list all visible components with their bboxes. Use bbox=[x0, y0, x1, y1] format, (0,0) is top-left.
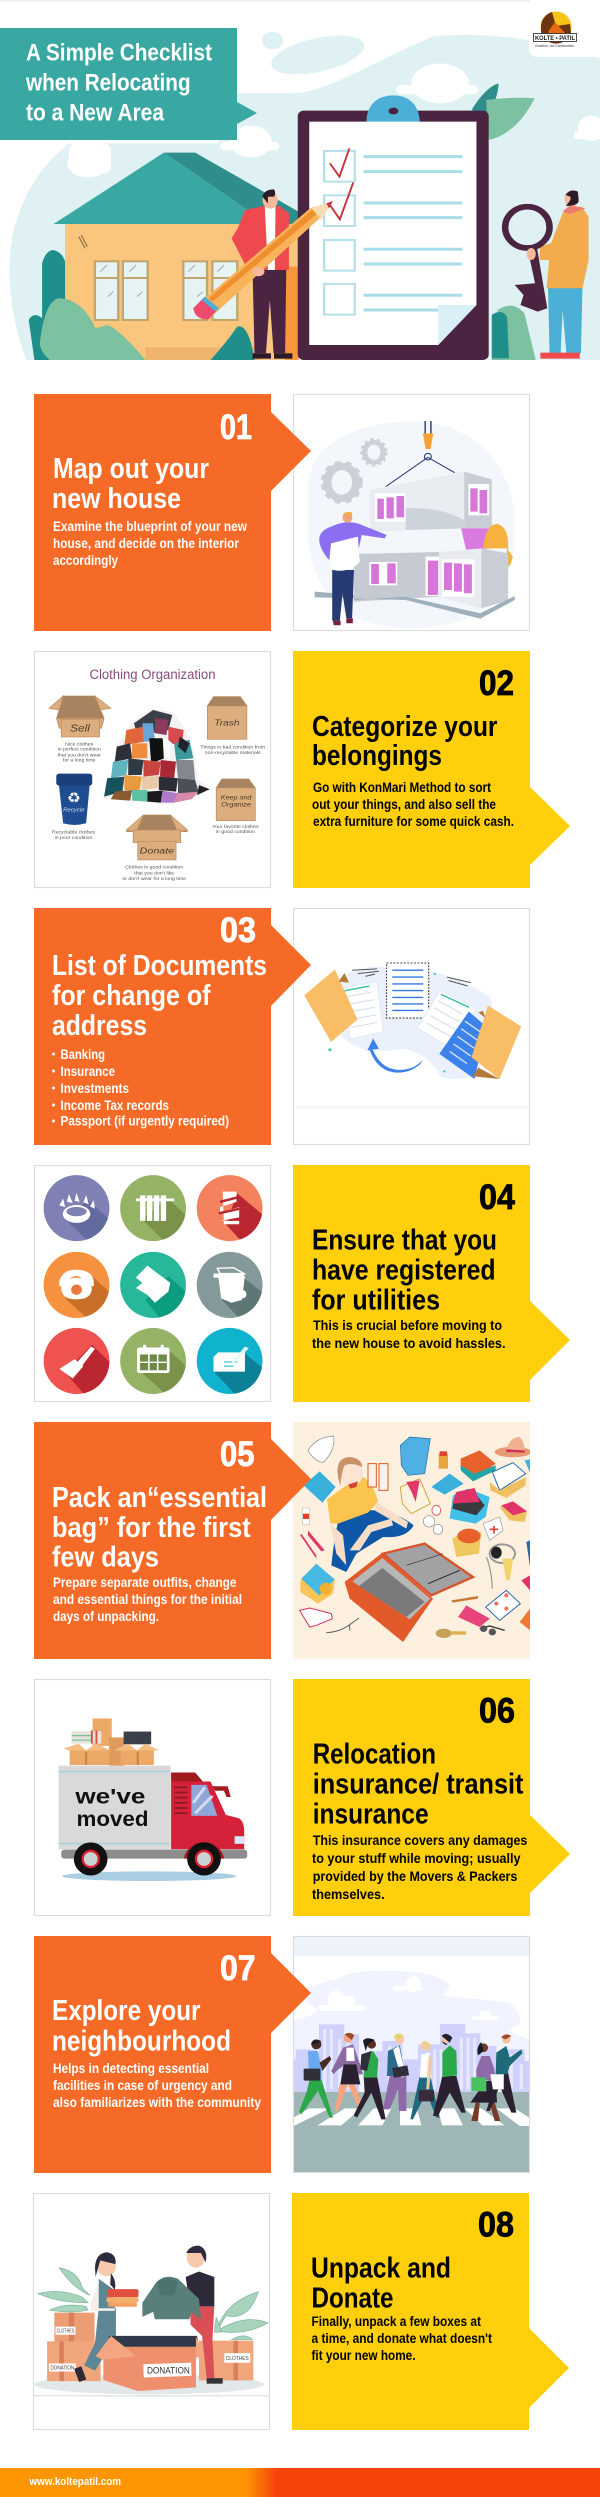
icon: return arrow bbox=[367, 1038, 423, 1073]
icon: recycle bin: Recycle bbox=[63, 807, 85, 813]
panel: step 05 text: days of unpacking. bbox=[53, 1608, 159, 1624]
panel: step 03 text: List of Documents bbox=[52, 950, 267, 982]
panel: step 01 text bbox=[34, 394, 311, 631]
list of documents: Investments bbox=[60, 1080, 129, 1096]
panel: step 04 text: Ensure that you bbox=[312, 1224, 497, 1256]
panel: step 08 text: Finally, unpack a few boxes at bbox=[312, 2313, 481, 2329]
title banner: A Simple Checklist bbox=[26, 40, 212, 67]
panel: step 02 image: for a long time bbox=[63, 758, 96, 763]
panel: step 02 image: Your favorite clothes bbox=[212, 824, 259, 830]
title banner bbox=[0, 28, 257, 140]
icon: radiator bbox=[120, 1175, 186, 1242]
panel: step 03 text: 03 bbox=[220, 911, 256, 950]
crosswalk bbox=[294, 2108, 529, 2126]
buildings skyline bbox=[294, 2024, 529, 2093]
panel: step 05 text bbox=[34, 1422, 311, 1659]
sign: we've moved bbox=[74, 1785, 148, 1831]
panel: step 01 text: Examine the blueprint of your new bbox=[53, 518, 247, 534]
boxes with labels: CLOTHES bbox=[226, 2356, 249, 2362]
panel: step 02 image: Donate bbox=[140, 846, 174, 855]
panel: step 02 text: belongings bbox=[312, 740, 442, 772]
main donation box bbox=[96, 2336, 205, 2391]
person 5 bbox=[410, 2041, 440, 2119]
panel: step 02 image: Nice clothes bbox=[65, 742, 94, 747]
person 4 bbox=[383, 2034, 409, 2111]
boxes with labels: DONATION bbox=[51, 2366, 74, 2372]
panel: step 07 street crowd image bbox=[293, 1936, 530, 2173]
list of documents: Income Tax records bbox=[60, 1097, 169, 1113]
boxes with labels bbox=[47, 2313, 253, 2381]
panel: step 06 text: themselves. bbox=[312, 1886, 385, 1902]
panel: step 04 utilities icons bbox=[34, 1166, 270, 1402]
panel: step 02 text: extra furniture for some quick cash. bbox=[313, 813, 514, 829]
panel: step 07 text: 07 bbox=[220, 1949, 256, 1988]
panel: step 06 text: to your stuff while moving; usually bbox=[312, 1850, 521, 1866]
person 2 bbox=[331, 2033, 363, 2111]
panel: step 04 text: have registered bbox=[312, 1254, 496, 1286]
panel: step 06 text: provided by the Movers & Packers bbox=[313, 1868, 518, 1884]
footer bar bbox=[0, 2468, 600, 2497]
panel: step 03 text: for change of bbox=[52, 980, 211, 1012]
hero illustration bbox=[0, 0, 600, 360]
icon: recycle bin: ♻ bbox=[67, 791, 81, 806]
panel: step 02 text: out your things, and also sell the bbox=[312, 796, 496, 812]
panel: step 01 text: new house bbox=[52, 483, 181, 515]
panel: step 04 text: for utilities bbox=[312, 1284, 440, 1316]
list of documents: Banking bbox=[60, 1046, 105, 1062]
panel: step 02 image: in perfect condition bbox=[58, 747, 101, 752]
icon: house bbox=[29, 153, 299, 360]
list of documents: Passport (if urgently required) bbox=[60, 1112, 229, 1128]
panel: step 07 text: facilities in case of urgency and bbox=[53, 2077, 232, 2093]
panel: step 05 text: 05 bbox=[220, 1435, 254, 1474]
panel: step 08 text: Unpack and bbox=[311, 2253, 451, 2285]
clothes pile bbox=[103, 708, 210, 805]
sign: we've moved: moved bbox=[77, 1807, 148, 1831]
panel: step 02 image: that you don't like bbox=[134, 871, 175, 876]
icon: man with key bbox=[492, 190, 589, 360]
person 3 bbox=[354, 2038, 386, 2119]
icon: man with pencil bbox=[193, 189, 333, 359]
man and jacket bbox=[142, 2246, 223, 2384]
panel: step 08 text bbox=[292, 2193, 569, 2430]
panel: step 02 text: Categorize your bbox=[312, 711, 498, 743]
panel: step 02 image: non-recyclable materials bbox=[205, 750, 261, 756]
panel: step 02 image: Things in bad condition from bbox=[200, 745, 265, 750]
panel: step 08 text: fit your new home. bbox=[312, 2347, 416, 2363]
panel: step 08 donation image bbox=[34, 2194, 270, 2430]
icon: left folder and paper bbox=[304, 970, 383, 1042]
main donation box: DONATION bbox=[147, 2366, 190, 2375]
panel: step 01 text: Map out your bbox=[53, 453, 209, 485]
panel: step 06 text bbox=[293, 1679, 570, 1916]
panel: step 05 text: bag” for the first bbox=[52, 1512, 251, 1544]
clothing and travel items bbox=[300, 1436, 531, 1638]
panel: step 08 text: 08 bbox=[478, 2206, 514, 2244]
logo: Creation, not Construction. bbox=[535, 43, 575, 48]
panel: step 07 text: Helps in detecting essential bbox=[53, 2060, 209, 2076]
panel: step 06 text: insurance bbox=[313, 1798, 429, 1830]
panel: step 02 image: Recyclable clothes bbox=[52, 830, 96, 835]
panel: step 02 image: Keep and bbox=[221, 794, 252, 801]
icon: recycle bin bbox=[56, 774, 92, 825]
panel: step 03 text: address bbox=[52, 1010, 147, 1042]
logo: KOLTE • PATIL bbox=[535, 36, 575, 42]
panel: step 04 text: the new house to avoid hassles. bbox=[312, 1335, 506, 1351]
panel: step 05 text: Prepare separate outfits, change bbox=[53, 1574, 237, 1590]
panel: step 02 image: that you don't wear bbox=[58, 753, 101, 758]
list of documents: Insurance bbox=[60, 1063, 115, 1079]
boxes with labels: CLOTHES bbox=[57, 2329, 75, 2334]
panel: step 04 text: This is crucial before moving to bbox=[313, 1317, 502, 1333]
person 6 bbox=[433, 2034, 466, 2116]
icon: plants bbox=[38, 2268, 268, 2340]
panel: step 07 text: Explore your bbox=[52, 1995, 200, 2027]
panel: step 02 image: Organize bbox=[221, 801, 251, 808]
panel: step 08 text: Donate bbox=[312, 2282, 394, 2314]
panel: step 02 text: 02 bbox=[479, 664, 514, 703]
panel: step 06 truck image bbox=[34, 1680, 270, 1916]
person 7 bbox=[470, 2042, 500, 2121]
icon: right folder and papers bbox=[417, 990, 521, 1079]
title banner: when Relocating bbox=[25, 70, 191, 97]
icon: calendar bbox=[120, 1328, 186, 1394]
panel: step 02 text bbox=[293, 651, 570, 888]
panel: step 01 text: accordingly bbox=[53, 552, 118, 568]
panel: step 05 text: Pack an“essential bbox=[52, 1482, 267, 1514]
panel: step 07 text bbox=[34, 1936, 311, 2173]
panel: step 06 text: insurance/ transit bbox=[313, 1769, 524, 1801]
panel: step 02 image: Trash bbox=[214, 718, 240, 727]
panel: step 08 text: a time, and donate what doesn't bbox=[312, 2330, 492, 2346]
panel: step 05 packing illustration bbox=[293, 1422, 531, 1659]
panel: step 02 image: in good condition bbox=[216, 829, 255, 835]
icon: signing a document bbox=[196, 1328, 262, 1394]
person 8 bbox=[486, 2034, 522, 2113]
icon: wheelie bin bbox=[196, 1252, 262, 1318]
panel: step 06 text: This insurance covers any damages bbox=[313, 1832, 528, 1848]
panel: step 02 text: Go with KonMari Method to sort bbox=[313, 779, 491, 795]
panel: step 02 image: Clothes in good condition bbox=[125, 865, 183, 870]
chart title: clothing organization: Clothing Organization bbox=[90, 667, 216, 682]
panel: step 05 text: and essential things for the initial bbox=[53, 1591, 242, 1607]
icon: boxes on truck bbox=[64, 1718, 159, 1766]
woman holding clothes bbox=[74, 2252, 139, 2382]
icon: dotted document bbox=[387, 963, 429, 1018]
panel: step 02 image: Sell bbox=[70, 723, 91, 734]
panel: step 02 image: in poor condition bbox=[55, 835, 93, 841]
logo bbox=[529, 0, 600, 57]
panel: step 07 text: also familiarizes with the community bbox=[53, 2094, 261, 2110]
panel: step 01 text: house, and decide on the interior bbox=[53, 535, 239, 551]
icon: gas burner bbox=[44, 1175, 110, 1242]
person 1 bbox=[299, 2039, 333, 2118]
panel: step 02 image bbox=[34, 652, 270, 888]
icon: package bbox=[120, 1252, 186, 1318]
icon: light bulb bbox=[196, 1175, 263, 1242]
panel: step 01 text: 01 bbox=[220, 408, 252, 447]
footer bar: www.koltepatil.com bbox=[29, 2476, 121, 2488]
panel: step 06 text: 06 bbox=[479, 1692, 515, 1731]
panel: step 04 text: 04 bbox=[479, 1178, 515, 1217]
icon: open suitcase bbox=[345, 1544, 473, 1642]
panel: step 02 image: or don't wear for a long time bbox=[122, 876, 186, 882]
panel: step 03 text bbox=[34, 908, 311, 1145]
panel: step 04 text bbox=[293, 1165, 570, 1402]
title banner: to a New Area bbox=[26, 99, 165, 126]
icon: paint brush bbox=[44, 1328, 110, 1394]
icon: truck cab bbox=[61, 1773, 247, 1875]
panel: step 01 image bbox=[294, 394, 530, 630]
panel: step 05 text: few days bbox=[52, 1542, 159, 1574]
panel: step 07 text: neighbourhood bbox=[52, 2026, 231, 2058]
icon: seated woman bbox=[327, 1457, 414, 1572]
icon: clipboard checklist bbox=[298, 95, 489, 360]
sign: we've moved: we've bbox=[74, 1785, 145, 1808]
panel: step 06 text: Relocation bbox=[313, 1739, 436, 1771]
icon: telephone bbox=[44, 1252, 110, 1318]
list of documents bbox=[52, 1046, 229, 1128]
panel: step 03 image bbox=[294, 908, 530, 1144]
